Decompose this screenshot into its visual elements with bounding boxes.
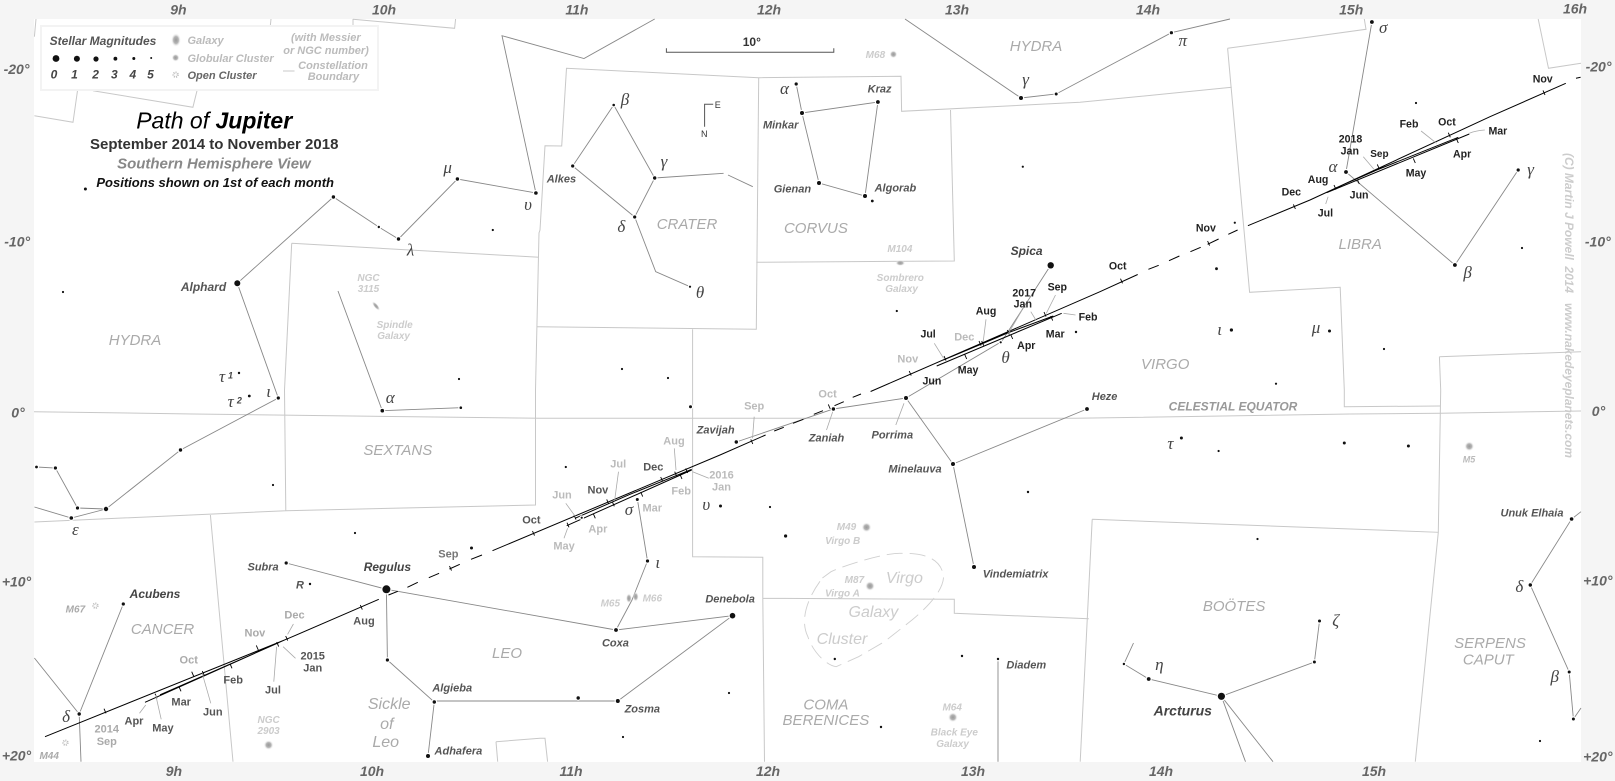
- star names: Subra: [248, 561, 279, 573]
- deep sky object labels: 3115: [358, 284, 380, 295]
- month labels: 2014-2015 loop: Sep: [97, 736, 117, 748]
- bottom hour labels: 9h: [166, 763, 182, 779]
- month labels: 2018 loop: Aug: [1308, 174, 1328, 186]
- star names: Coxa: [602, 637, 629, 649]
- deep sky object labels: M5: [1463, 455, 1476, 465]
- compass: [701, 100, 721, 139]
- star names: Zaniah: [808, 432, 845, 444]
- month labels: 2014-2015 loop: [95, 514, 541, 748]
- deep sky object labels: M65: [601, 598, 620, 610]
- month labels: 2016-2017 loop: May: [958, 365, 979, 377]
- month labels: 2015-2016 loop: 2016: [709, 469, 734, 481]
- greek star letters: 2: [236, 396, 242, 406]
- greek star letters: π: [1179, 31, 1188, 50]
- greek star letters: τ: [1167, 434, 1174, 453]
- month labels: 2014-2015 loop: May: [152, 723, 174, 735]
- month labels: 2018 loop: Sep: [1370, 149, 1389, 160]
- month labels: 2015-2016 loop: Sep: [744, 400, 765, 412]
- month labels: 2016-2017 loop: Oct: [1109, 260, 1127, 272]
- star names: Heze: [1092, 391, 1117, 403]
- constellation names: LIBRA: [1339, 236, 1382, 253]
- star names: Algorab: [874, 183, 916, 195]
- month labels: 2015-2016 loop: [552, 389, 837, 552]
- month labels: 2014-2015 loop: Jul: [265, 684, 281, 696]
- bottom hour labels: 14h: [1149, 763, 1173, 779]
- deep sky object labels: M66: [643, 594, 662, 604]
- deep sky object labels: M64: [942, 702, 962, 714]
- virgo galaxy cluster label: Virgo: [886, 570, 923, 587]
- legend: object type labels: Open Cluster: [188, 70, 257, 82]
- month labels: 2015-2016 loop: Dec: [643, 461, 663, 473]
- star names: Minkar: [763, 119, 799, 131]
- greek star letters: μ: [1311, 318, 1320, 337]
- month labels: 2018 loop: Nov: [1533, 73, 1553, 85]
- month labels: 2015-2016 loop: Aug: [663, 436, 685, 448]
- star names: Algieba: [431, 682, 472, 694]
- month labels: 2014-2015 loop: 2014: [95, 724, 120, 736]
- bottom hour labels: 11h: [559, 763, 583, 779]
- top hour labels: 10h: [372, 2, 396, 18]
- legend: boundary sample: [283, 70, 294, 72]
- month labels: 2014-2015 loop: Aug: [353, 616, 375, 628]
- greek star letters: α: [1329, 157, 1339, 176]
- star names: Minelauva: [888, 463, 942, 475]
- right declination labels: 0°: [1592, 403, 1606, 419]
- legend: object type labels: [188, 35, 274, 82]
- title: Path of Jupiter: [136, 108, 293, 134]
- top hour labels: 14h: [1136, 2, 1160, 18]
- celestial equator label: CELESTIAL EQUATOR: [1169, 400, 1298, 414]
- greek star letters: δ: [62, 707, 71, 726]
- legend: notes: or NGC number): [283, 45, 369, 57]
- month labels: 2018 loop: May: [1406, 168, 1426, 180]
- constellation names: CANCER: [131, 621, 194, 638]
- month labels: 2014-2015 loop: Dec: [284, 609, 305, 621]
- star names: Denebola: [705, 593, 755, 605]
- bottom hour labels: [166, 763, 1386, 779]
- top hour labels: [170, 0, 1587, 18]
- top hour labels: 9h: [170, 2, 187, 18]
- month labels: 2015-2016 loop: Feb: [671, 485, 691, 497]
- greek star letters: η: [1155, 655, 1164, 674]
- legend: magnitude numbers: 3: [111, 68, 118, 82]
- month labels: 2014-2015 loop: Nov: [245, 627, 266, 639]
- constellation names: HYDRA: [1010, 38, 1062, 55]
- constellation names: SERPENS: [1454, 635, 1526, 652]
- star names: Diadem: [1006, 659, 1046, 671]
- legend heading: stellar magnitudes: Stellar Magnitudes: [50, 34, 157, 48]
- deep sky object labels: M68: [866, 50, 886, 61]
- star names: Gienan: [774, 183, 811, 195]
- deep sky object labels: M87: [845, 575, 865, 586]
- path segment: 2018 retrograde loop: [1248, 77, 1581, 226]
- month labels: 2015-2016 loop: Jan: [712, 482, 731, 494]
- month labels: 2014-2015 loop: Jan: [303, 663, 322, 675]
- legend: notes: Boundary: [308, 71, 360, 83]
- deep sky object labels: Spindle: [377, 320, 413, 331]
- greek star letters: 1: [228, 370, 233, 380]
- month labels: 2015-2016 loop: Nov: [588, 484, 609, 496]
- virgo galaxy cluster label: Cluster: [817, 631, 868, 648]
- greek star letters: υ: [702, 495, 710, 514]
- compass: E: [715, 100, 721, 110]
- deep sky object labels: Galaxy: [377, 331, 410, 342]
- hemisphere view: Southern Hemisphere View: [117, 155, 312, 172]
- month labels: 2014-2015 loop: Oct: [180, 654, 198, 666]
- greek star letters: θ: [696, 283, 704, 302]
- month labels: 2016-2017 loop: Jul: [920, 329, 936, 341]
- greek star letters: β: [1462, 263, 1472, 282]
- copyright credit: (C) Martin J Powell 2014 www.nakedeyeplanets.com: [1562, 153, 1576, 458]
- left declination labels: 0°: [11, 404, 25, 420]
- bottom hour labels: 10h: [360, 763, 384, 779]
- deep sky object labels: NGC: [357, 273, 380, 284]
- month labels: 2015-2016 loop: Oct: [818, 389, 837, 401]
- star names: Alphard: [180, 280, 227, 294]
- deep sky object labels: Black Eye: [931, 728, 978, 738]
- deep sky object labels: Virgo A: [825, 588, 860, 600]
- right declination labels: +10°: [1583, 573, 1613, 589]
- bottom hour labels: 13h: [961, 763, 985, 779]
- scale bar: 10°: [743, 35, 761, 49]
- positions note: Positions shown on 1st of each month: [96, 175, 334, 190]
- bottom hour labels: 12h: [756, 763, 780, 779]
- constellation names: of: [380, 716, 395, 733]
- month labels: 2018 loop: Mar: [1488, 125, 1507, 137]
- star names: Vindemiatrix: [983, 568, 1049, 580]
- greek star letters: ι: [1217, 320, 1222, 339]
- bottom hour labels: 15h: [1362, 763, 1386, 779]
- title block: [90, 108, 338, 190]
- month labels: 2014-2015 loop: Mar: [171, 696, 192, 708]
- right declination labels: [1583, 59, 1613, 765]
- deep sky object labels: M67: [66, 604, 86, 616]
- month labels: 2015-2016 loop: Jul: [610, 458, 626, 470]
- legend: magnitude numbers: 5: [147, 68, 154, 82]
- top hour labels: 13h: [945, 2, 969, 18]
- star names: Regulus: [364, 560, 411, 574]
- month labels: 2016-2017 loop: [897, 186, 1301, 388]
- deep sky object labels: Galaxy: [885, 284, 918, 295]
- legend: object type labels: Globular Cluster: [188, 53, 274, 65]
- greek star letters: υ: [524, 195, 532, 214]
- legend: magnitude numbers: [51, 68, 154, 82]
- deep sky object labels: M104: [887, 244, 913, 255]
- greek star letters: ι: [655, 553, 660, 572]
- greek star letters: ι: [266, 382, 271, 401]
- path dashes: late 2016: [774, 394, 861, 431]
- month labels: 2015-2016 loop: Mar: [643, 502, 663, 514]
- path segment: 2015-2016 retrograde loop: [492, 435, 766, 551]
- deep sky object labels: Sombrero: [877, 273, 924, 284]
- monthly position ticks: [104, 90, 1545, 713]
- constellation names: COMA: [803, 697, 848, 714]
- month labels: 2018 loop: Feb: [1400, 118, 1419, 130]
- right declination labels: -20°: [1586, 59, 1612, 75]
- virgo galaxy cluster label: Galaxy: [849, 604, 899, 621]
- constellation names: Leo: [372, 734, 399, 751]
- top hour labels: 16h: [1563, 0, 1587, 16]
- virgo galaxy cluster label: [817, 570, 923, 648]
- left declination labels: -10°: [4, 233, 31, 249]
- top hour labels: 12h: [757, 2, 781, 18]
- star names: Unuk Elhaia: [1501, 507, 1563, 519]
- month labels: 2016-2017 loop: Sep: [1048, 282, 1068, 294]
- greek star letters: λ: [406, 240, 414, 260]
- greek star letters: τ: [228, 392, 235, 411]
- top hour labels: 11h: [565, 2, 588, 18]
- month labels: 2016-2017 loop: 2017: [1012, 287, 1036, 299]
- legend: magnitude numbers: 2: [91, 68, 99, 82]
- scale bar: [666, 35, 834, 52]
- constellation names: CAPUT: [1463, 652, 1516, 669]
- greek star letters: σ: [625, 500, 634, 519]
- legend panel: [41, 26, 378, 90]
- greek star letters: τ: [219, 367, 226, 386]
- greek star letters: ε: [72, 520, 79, 539]
- greek star letters: θ: [1001, 348, 1010, 367]
- path dashes: behind the sun: [407, 555, 482, 587]
- constellation names: CRATER: [657, 216, 717, 233]
- left declination labels: +10°: [2, 574, 32, 590]
- month labels: 2016-2017 loop: Apr: [1017, 340, 1035, 352]
- month leader lines: [140, 130, 1485, 719]
- month labels: 2014-2015 loop: Sep: [438, 548, 459, 560]
- month labels: 2018 loop: Jan: [1341, 146, 1359, 158]
- month labels: 2016-2017 loop: Feb: [1079, 311, 1098, 323]
- path segment: 2016-2017 retrograde loop: [871, 274, 1138, 392]
- month labels: 2018 loop: 2018: [1339, 133, 1362, 145]
- date range: September 2014 to November 2018: [90, 136, 338, 153]
- legend: magnitude numbers: 0: [51, 68, 58, 82]
- star names: Porrima: [872, 429, 913, 441]
- deep sky object labels: NGC: [257, 715, 280, 726]
- constellation names: LEO: [492, 645, 522, 662]
- legend: object type labels: Galaxy: [188, 35, 224, 47]
- month labels: 2016-2017 loop: Dec: [1282, 186, 1301, 198]
- star names: Zosma: [624, 704, 660, 716]
- constellation names: VIRGO: [1141, 356, 1190, 373]
- greek star letters: μ: [442, 158, 452, 177]
- star names: [129, 83, 1563, 757]
- path dashes: late 2017: [1148, 230, 1238, 269]
- legend: notes: Constellation: [298, 60, 368, 72]
- month labels: 2016-2017 loop: Dec: [954, 331, 974, 343]
- month labels: 2016-2017 loop: Nov: [1196, 222, 1216, 234]
- legend: notes: (with Messier: [291, 32, 361, 44]
- left declination labels: +20°: [2, 748, 32, 764]
- deep sky object labels: M49: [837, 522, 857, 533]
- month labels: 2014-2015 loop: Feb: [223, 674, 243, 686]
- star names: Spica: [1011, 244, 1043, 258]
- constellation names: BOÖTES: [1203, 597, 1265, 615]
- star names: Zavijah: [696, 424, 735, 436]
- greek star letters: γ: [1527, 160, 1535, 179]
- month labels: 2016-2017 loop: Nov: [897, 354, 919, 366]
- right declination labels: -10°: [1585, 233, 1611, 249]
- month labels: 2016-2017 loop: Jan: [1014, 299, 1032, 311]
- greek star letters: β: [620, 90, 630, 109]
- month labels: 2014-2015 loop: Jun: [203, 706, 223, 718]
- legend: object type icons: [171, 33, 181, 77]
- month labels: 2016-2017 loop: Mar: [1046, 329, 1065, 341]
- month labels: 2016-2017 loop: Aug: [976, 306, 996, 318]
- month labels: 2015-2016 loop: May: [553, 540, 576, 552]
- month labels: 2018 loop: [1308, 73, 1553, 219]
- star names: Alkes: [546, 173, 576, 185]
- deep sky object labels: Virgo B: [825, 536, 860, 547]
- compass: N: [701, 129, 708, 139]
- path segment: 2014-2015 retrograde loop: [45, 591, 398, 737]
- legend: magnitude numbers: 1: [71, 68, 78, 82]
- deep sky object icons: [63, 50, 1474, 750]
- constellation names: HYDRA: [109, 332, 161, 349]
- star names: Acubens: [129, 587, 181, 601]
- constellation names: CORVUS: [784, 220, 848, 237]
- constellation names: Sickle: [368, 696, 411, 713]
- greek star letters: ζ: [1332, 611, 1340, 630]
- top hour labels: 15h: [1339, 2, 1363, 18]
- left declination labels: [2, 61, 32, 764]
- greek star letters: γ: [1022, 70, 1030, 89]
- star names: Kraz: [868, 83, 892, 95]
- greek star letters: γ: [661, 152, 669, 171]
- star names: Arcturus: [1153, 703, 1212, 719]
- legend: magnitude numbers: 4: [128, 68, 136, 82]
- celestial equator line: [34, 411, 1581, 418]
- greek star letters: δ: [617, 217, 626, 236]
- greek star letters: α: [780, 79, 790, 98]
- constellation names: SEXTANS: [363, 442, 432, 459]
- right declination labels: +20°: [1583, 749, 1613, 765]
- month labels: 2018 loop: Oct: [1438, 117, 1456, 129]
- month labels: 2015-2016 loop: Jun: [552, 489, 572, 501]
- deep sky object labels: M44: [39, 751, 59, 762]
- star names: R: [296, 579, 304, 591]
- greek star letters: δ: [1515, 577, 1524, 596]
- greek star letters: α: [386, 388, 396, 407]
- greek star letters: σ: [1379, 18, 1388, 37]
- month labels: 2018 loop: Apr: [1453, 149, 1471, 161]
- month labels: 2014-2015 loop: Oct: [522, 514, 541, 526]
- deep sky object labels: 2903: [256, 726, 280, 737]
- left declination labels: -20°: [4, 61, 30, 77]
- legend: notes: [283, 32, 369, 83]
- deep sky object labels: Galaxy: [936, 739, 969, 750]
- virgo galaxy cluster outline: [804, 553, 944, 667]
- month labels: 2018 loop: Jun: [1350, 190, 1369, 202]
- greek star letters: β: [1549, 667, 1559, 686]
- constellation names: BERENICES: [783, 712, 869, 729]
- month labels: 2016-2017 loop: Jun: [922, 376, 941, 388]
- month labels: 2018 loop: Jul: [1318, 207, 1333, 219]
- month labels: 2014-2015 loop: 2015: [300, 650, 325, 662]
- month labels: 2014-2015 loop: Apr: [125, 716, 144, 728]
- star names: Adhafera: [434, 745, 482, 757]
- legend: magnitude dots: [53, 55, 152, 62]
- month labels: 2015-2016 loop: Apr: [588, 524, 608, 536]
